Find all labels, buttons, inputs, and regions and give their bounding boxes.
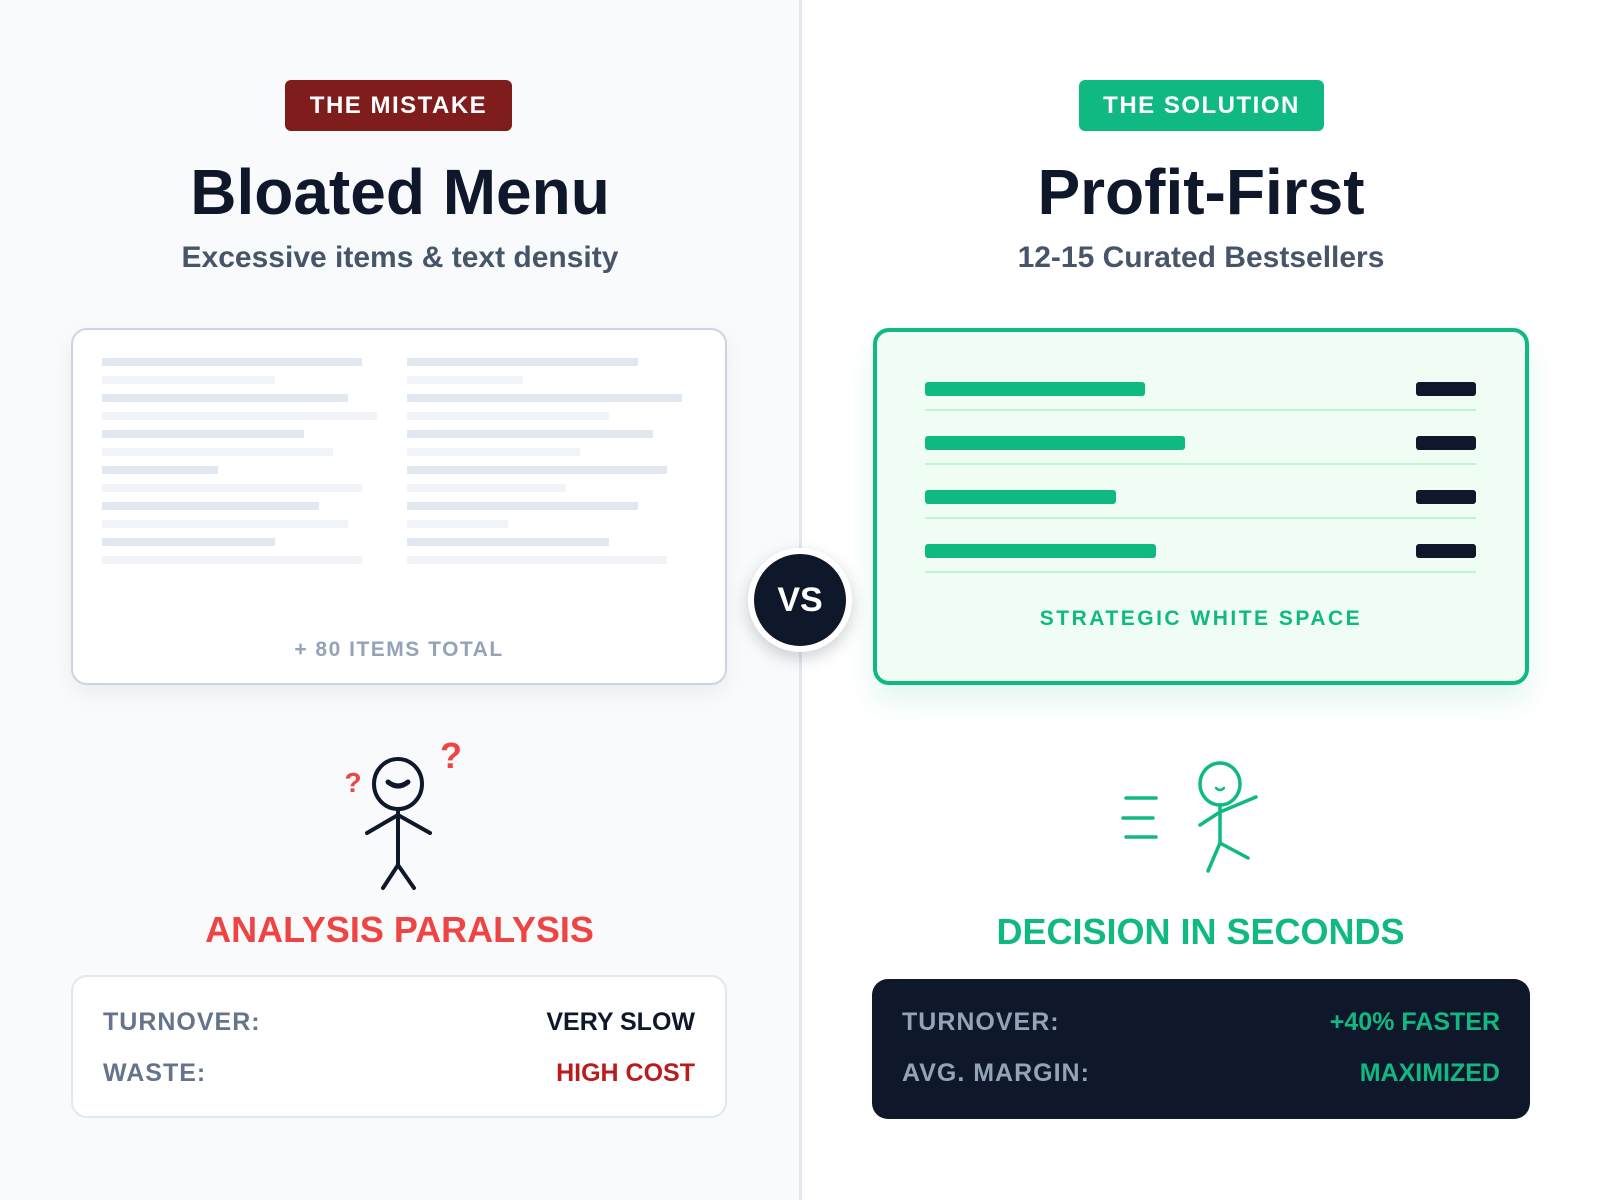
stat: turnover [103, 1008, 695, 1036]
stat: waste [103, 1059, 695, 1087]
heading: analysis paralysis: ANALYSIS PARALYSIS [205, 909, 594, 950]
stat: turnover: +40% FASTER [1330, 1008, 1500, 1036]
stat: avg margin: MAXIMIZED [1360, 1059, 1500, 1087]
panel: bloated menu card [71, 328, 727, 685]
stat: waste: HIGH COST [556, 1059, 695, 1087]
items total label: + 80 ITEMS TOTAL [294, 638, 504, 661]
title: profit-first: Profit-First [1037, 156, 1365, 228]
panel: left stats [71, 975, 727, 1118]
divider [799, 0, 802, 1200]
subtitle: right: 12-15 Curated Bestsellers [1018, 241, 1384, 274]
menu lines [102, 358, 682, 564]
stat: turnover [902, 1008, 1500, 1036]
panel: right stats [872, 979, 1530, 1119]
stat: turnover: TURNOVER: [902, 1008, 1060, 1036]
stat: turnover: TURNOVER: [103, 1008, 261, 1036]
vs badge: VS [777, 581, 823, 619]
heading: decision in seconds: DECISION IN SECONDS [996, 911, 1405, 952]
strategic white space label: STRATEGIC WHITE SPACE [1040, 607, 1362, 630]
subtitle: left: Excessive items & text density [182, 241, 618, 274]
stat: avg margin [902, 1059, 1500, 1087]
stat: waste: WASTE: [103, 1059, 206, 1087]
icon: confused stick figure: ? [440, 735, 462, 776]
icon: confused stick figure [344, 735, 462, 890]
vs badge [748, 548, 852, 652]
icon: confused stick figure: ? [344, 767, 362, 798]
badge: the solution [1079, 80, 1324, 131]
menu items [925, 382, 1476, 573]
badge: the solution: THE SOLUTION [1103, 92, 1300, 119]
badge: the mistake: THE MISTAKE [310, 92, 487, 119]
panel: curated menu card [873, 328, 1529, 685]
title: bloated menu: Bloated Menu [190, 156, 610, 228]
badge: the mistake [285, 80, 512, 131]
stat: turnover: VERY SLOW [546, 1008, 695, 1036]
stat: avg margin: AVG. MARGIN: [902, 1059, 1090, 1087]
panel: left background [0, 0, 799, 1200]
icon: running stick figure [1121, 761, 1258, 873]
